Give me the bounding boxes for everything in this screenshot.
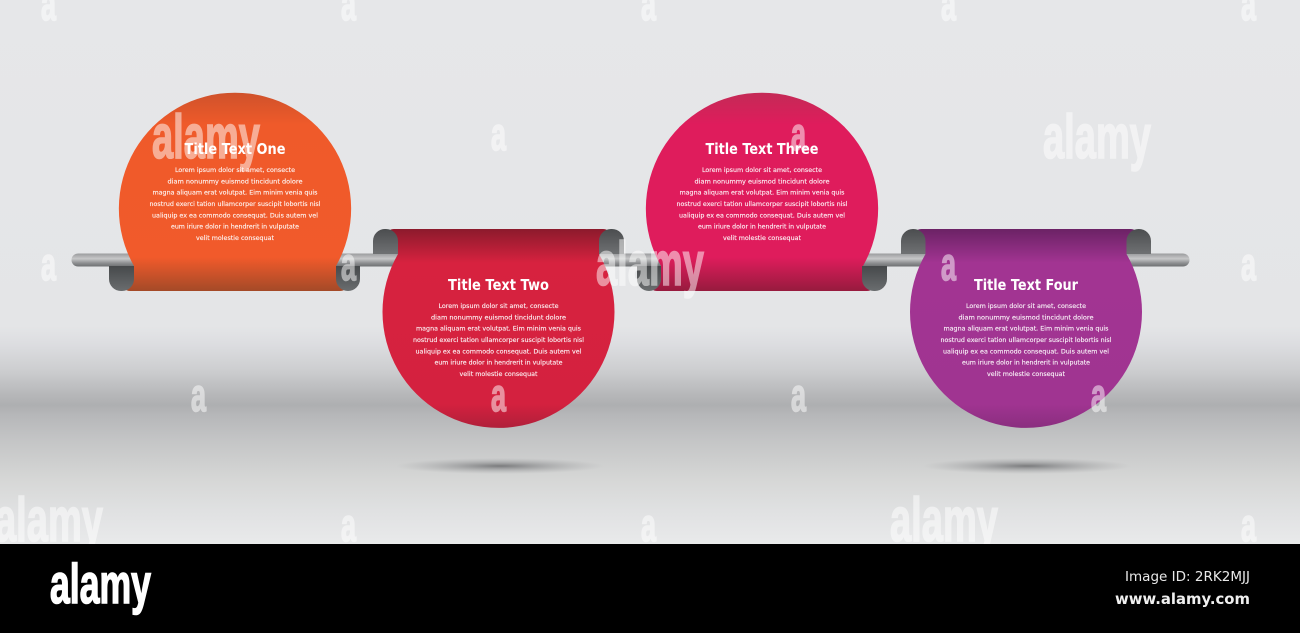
- body text three: [676, 166, 848, 242]
- body text three: diam nonummy euismod tincidunt dolore: [694, 177, 830, 185]
- body text two: Lorem ipsum dolor sit amet, consecte: [438, 302, 558, 310]
- roller caps four: [901, 229, 1151, 254]
- footer bar: [0, 544, 1300, 633]
- watermarks: a: [1241, 499, 1256, 551]
- watermarks: a: [791, 369, 806, 421]
- body text three: ualiquip ex ea commodo consequat. Duis autem vel: [679, 211, 845, 219]
- heading two: Title Text Two: [448, 276, 549, 294]
- circle tab one: [119, 93, 351, 291]
- watermarks: a: [941, 238, 956, 290]
- alamy logo: alamy: [50, 552, 151, 615]
- panel: step one: [109, 93, 360, 291]
- body text four: eum iriure dolor in hendrerit in vulputate: [962, 359, 1090, 367]
- body text three: nostrud exerci tation ullamcorper suscipit lobortis nisl: [676, 200, 848, 208]
- floor shadow under step two: [396, 458, 604, 474]
- site url: www.alamy.com: [1115, 590, 1250, 608]
- heading four: Title Text Four: [974, 276, 1079, 294]
- floor shadow under step four: [923, 458, 1131, 474]
- body text two: diam nonummy euismod tincidunt dolore: [431, 313, 566, 321]
- heading three: Title Text Three: [706, 140, 818, 158]
- panel: step four: [901, 229, 1151, 428]
- watermarks: alamy: [1043, 103, 1151, 172]
- watermarks: a: [1091, 369, 1106, 421]
- watermarks: a: [41, 238, 56, 290]
- watermarks: a: [191, 369, 206, 421]
- watermarks: a: [341, 499, 356, 551]
- circle tab two: [383, 229, 614, 428]
- watermarks: a: [491, 108, 506, 160]
- watermarks: alamy: [596, 230, 704, 299]
- body text four: Lorem ipsum dolor sit amet, consecte: [966, 302, 1086, 310]
- body text one: Lorem ipsum dolor sit amet, consecte: [175, 166, 295, 174]
- body text four: diam nonummy euismod tincidunt dolore: [958, 313, 1094, 321]
- body text two: velit molestie consequat: [460, 370, 538, 378]
- body text one: eum iriure dolor in hendrerit in vulputate: [171, 223, 299, 231]
- horizontal rod: [72, 254, 1190, 266]
- body text three: velit molestie consequat: [723, 234, 801, 242]
- heading one: Title Text One: [184, 140, 286, 158]
- body text one: [150, 166, 321, 242]
- body text four: magna aliquam erat volutpat. Eim minim venia quis: [944, 325, 1109, 333]
- body text four: nostrud exerci tation ullamcorper suscipit lobortis nisl: [940, 336, 1112, 344]
- panel: step three: [637, 93, 887, 291]
- panel: step two: [373, 229, 624, 428]
- body text two: [413, 302, 584, 378]
- circle tab four: [910, 229, 1142, 428]
- body text two: magna aliquam erat volutpat. Eim minim venia quis: [416, 325, 582, 333]
- roller caps one: [109, 266, 360, 291]
- body text four: [940, 302, 1112, 378]
- roller caps two: [373, 229, 624, 254]
- roller caps three: [637, 266, 887, 291]
- body text one: diam nonummy euismod tincidunt dolore: [168, 177, 302, 185]
- circle tab three: [646, 93, 878, 291]
- body text two: nostrud exerci tation ullamcorper suscipit lobortis nisl: [413, 336, 584, 344]
- watermarks: a: [1241, 238, 1256, 290]
- watermarks: alamy: [890, 486, 998, 555]
- body text two: eum iriure dolor in hendrerit in vulputate: [434, 359, 562, 367]
- body text four: ualiquip ex ea commodo consequat. Duis autem vel: [943, 347, 1109, 355]
- body text three: magna aliquam erat volutpat. Eim minim venia quis: [680, 189, 845, 197]
- body text three: Lorem ipsum dolor sit amet, consecte: [702, 166, 822, 174]
- body text two: ualiquip ex ea commodo consequat. Duis autem vel: [416, 347, 582, 355]
- watermarks: a: [791, 108, 806, 160]
- body text one: nostrud exerci tation ullamcorper suscipit lobortis nisl: [150, 200, 321, 208]
- watermarks: a: [491, 369, 506, 421]
- body text three: eum iriure dolor in hendrerit in vulputate: [698, 223, 826, 231]
- body text one: ualiquip ex ea commodo consequat. Duis autem vel: [152, 211, 318, 219]
- watermarks: a: [641, 499, 656, 551]
- watermarks: alamy: [152, 103, 260, 172]
- body text one: velit molestie consequat: [196, 234, 274, 242]
- body text one: magna aliquam erat volutpat. Eim minim venia quis: [152, 189, 318, 197]
- image id: Image ID: 2RK2MJJ: [1125, 570, 1250, 585]
- watermarks: alamy: [0, 486, 103, 555]
- watermarks: a: [341, 238, 356, 290]
- body text four: velit molestie consequat: [987, 370, 1065, 378]
